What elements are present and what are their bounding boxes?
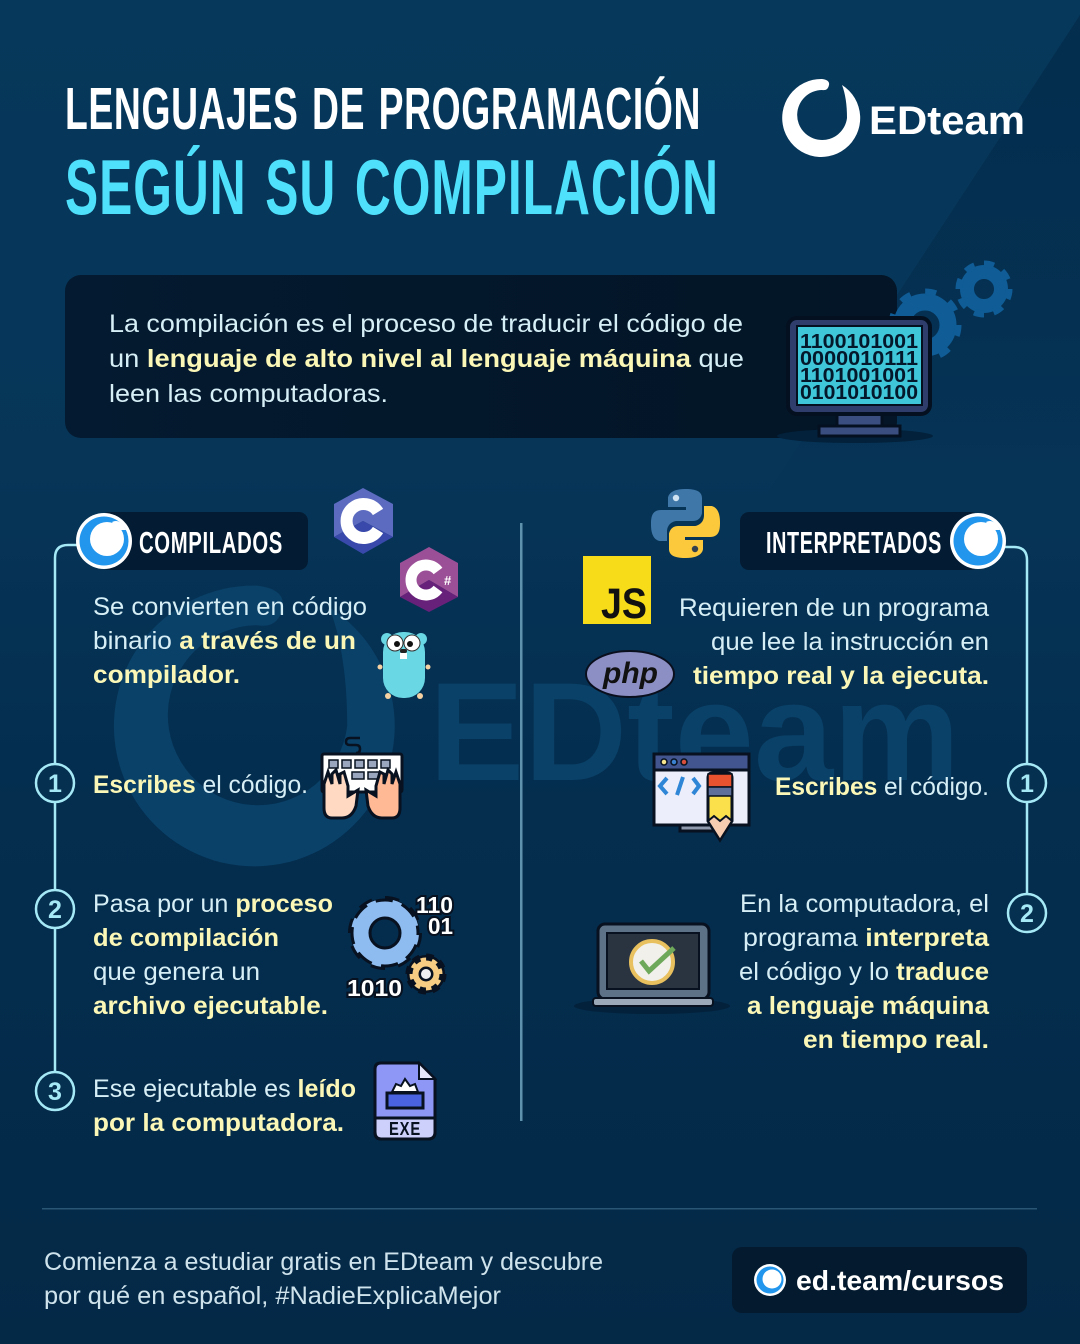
icon: gears and binary: 110 <box>416 892 453 918</box>
icon: monitor with binary code: 1101001001 <box>800 365 918 387</box>
step number 3: 3 <box>48 1078 62 1106</box>
icon: monitor with binary code <box>777 318 933 443</box>
icon: monitor with binary code: 1100101001 <box>800 331 918 353</box>
icon: code window and pencil <box>654 754 749 840</box>
text: compilados step 2: que genera un <box>93 958 260 986</box>
icon: monitor with binary code: 0000010111 <box>800 348 918 370</box>
text: interpretados step 2: En la computadora, el <box>740 890 989 918</box>
icon: gears and binary <box>347 892 453 1001</box>
text: compilados intro: Se convierten en código <box>93 593 367 621</box>
title: LENGUAJES DE PROGRAMACIÓN <box>65 76 701 142</box>
watermark logo: EDteam <box>429 653 960 810</box>
icon: JavaScript: JS <box>601 580 647 628</box>
EDteam logo <box>782 79 1025 157</box>
text: compilados step 2 <box>93 890 333 1020</box>
icon: gears behind monitor <box>892 264 1009 358</box>
text: interpretados intro: que lee la instrucción en <box>711 628 989 656</box>
EDteam logo: EDteam <box>869 99 1025 143</box>
heading: interpretados <box>740 512 1006 570</box>
title: SEGÚN SU COMPILACIÓN <box>65 143 719 231</box>
text: interpretados step 2: en tiempo real. <box>803 1026 989 1054</box>
footer divider <box>42 1208 1037 1210</box>
icon: C sharp: # <box>444 573 452 588</box>
text: interpretados step 2: programa interpreta <box>743 924 990 952</box>
step number 2 right <box>1008 894 1046 932</box>
intro text: La compilación es el proceso de traducir el código de <box>109 310 743 338</box>
text: interpretados step 1: Escribes el código. <box>775 773 989 801</box>
icon: keyboard and hands <box>322 738 402 818</box>
watermark logo <box>114 586 960 866</box>
text: compilados step 2: de compilación <box>93 924 279 952</box>
timeline: interpretados <box>1002 547 1046 932</box>
text: compilados intro <box>93 593 367 689</box>
timeline: compilados <box>36 545 80 1110</box>
call to action button: ed.team/cursos <box>796 1265 1004 1296</box>
step number 1 <box>36 764 74 802</box>
text: compilados step 1: Escribes el código. <box>93 771 308 799</box>
heading: interpretados: INTERPRETADOS <box>766 525 942 560</box>
step number 2: 2 <box>48 896 62 924</box>
icon: JavaScript <box>583 556 651 628</box>
text: interpretados step 2: el código y lo traduce <box>739 958 989 986</box>
text: interpretados intro <box>679 594 989 690</box>
text: interpretados step 2: a lenguaje máquina <box>747 992 990 1020</box>
text: compilados step 3: por la computadora. <box>93 1109 344 1137</box>
footer text <box>44 1248 603 1310</box>
icon: PHP: php <box>602 657 658 690</box>
icon: gears and binary: 01 <box>428 913 453 939</box>
footer text: Comienza a estudiar gratis en EDteam y descubre <box>44 1248 603 1276</box>
text: compilados step 2: Pasa por un proceso <box>93 890 333 918</box>
heading: compilados <box>76 512 308 570</box>
text: compilados step 3 <box>93 1075 356 1137</box>
step number 2 <box>36 890 74 928</box>
icon: Go gopher <box>378 632 430 699</box>
step number 1 right <box>1008 764 1046 802</box>
icon: PHP <box>586 651 674 697</box>
text: compilados step 2: archivo ejecutable. <box>93 992 328 1020</box>
text: compilados step 3: Ese ejecutable es leído <box>93 1075 356 1103</box>
step number 3 <box>36 1072 74 1110</box>
intro text: leen las computadoras. <box>109 380 388 408</box>
footer text: por qué en español, #NadieExplicaMejor <box>44 1282 501 1310</box>
column divider <box>520 523 522 1121</box>
text: interpretados intro: Requieren de un programa <box>679 594 989 622</box>
intro text: un lenguaje de alto nivel al lenguaje máquina que <box>109 345 744 373</box>
icon: C sharp <box>400 547 458 612</box>
intro text <box>109 310 744 408</box>
call to action button <box>732 1247 1027 1313</box>
text: compilados intro: binario a través de un <box>93 627 356 655</box>
icon: monitor with binary code: 0101010100 <box>800 382 918 404</box>
intro panel <box>65 275 897 438</box>
heading: compilados: COMPILADOS <box>139 525 283 560</box>
text: interpretados step 2 <box>739 890 990 1054</box>
step number 1: 1 <box>48 770 62 798</box>
icon: Python <box>651 489 720 558</box>
title <box>65 76 719 231</box>
text: compilados intro: compilador. <box>93 661 240 689</box>
icon: laptop with clock check <box>574 924 730 1014</box>
icon: C <box>334 488 393 554</box>
icon: exe file: EXE <box>389 1119 421 1139</box>
icon: gears and binary: 1010 <box>347 975 402 1001</box>
text: interpretados intro: tiempo real y la ejecuta. <box>693 662 989 690</box>
icon: exe file <box>375 1063 435 1139</box>
step number 1 right: 1 <box>1020 770 1034 798</box>
step number 2 right: 2 <box>1020 900 1034 928</box>
